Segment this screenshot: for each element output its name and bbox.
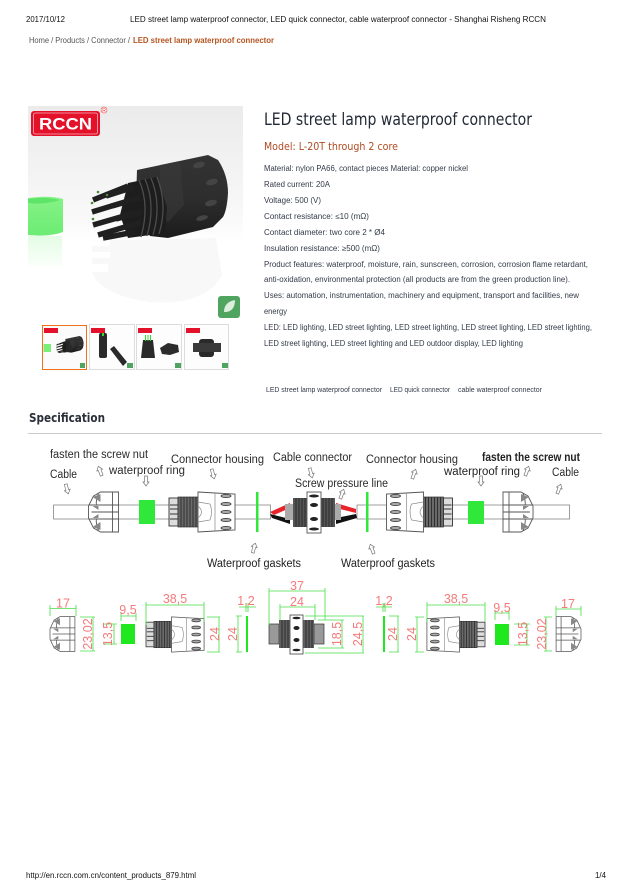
right screw nut	[503, 492, 533, 532]
right gasket dimensions: 1,2	[375, 594, 393, 608]
left nut dimensions: 17	[56, 596, 70, 610]
right ring dimensions: 9,5	[493, 601, 511, 615]
model: Model: L-20T through 2 core	[264, 141, 398, 153]
diagram labels: waterproof ring	[443, 466, 520, 478]
centre cable connector	[270, 492, 357, 533]
right nut dimensions: 23,02	[535, 618, 549, 650]
diagram labels: Cable connector	[273, 452, 352, 464]
right gasket dimensions	[375, 594, 400, 652]
diagram labels: fasten the screw nut	[50, 449, 149, 461]
diagram labels: Screw pressure line	[295, 478, 388, 490]
dimension drawings	[50, 579, 581, 654]
left connector housing	[169, 492, 235, 532]
right nut dimensions: 17	[561, 597, 575, 611]
right housing dimensions: 24	[405, 627, 419, 641]
centre connector dimensions: 24	[290, 595, 304, 609]
centre connector dimensions: 24,5	[351, 622, 365, 646]
product title: LED street lamp waterproof connector	[264, 110, 532, 129]
specification text block: anti-oxidation, environmental protection (all products are from the green production line).	[264, 275, 570, 284]
specification text block: Contact diameter: two core 2 * Ø4	[264, 228, 386, 237]
main product photo	[28, 106, 243, 320]
page header: LED street lamp waterproof connector, LED quick connector, cable waterproof connector - Shanghai Risheng RCCN	[130, 14, 546, 24]
page header: 2017/10/12	[26, 14, 65, 24]
left waterproof ring	[139, 500, 155, 524]
specification text block: Material: nylon PA66, contact pieces Material: copper nickel	[264, 164, 468, 173]
specification heading: Specification	[29, 411, 105, 425]
breadcrumb	[29, 36, 274, 45]
left housing dimensions	[146, 592, 222, 652]
exploded connector diagram	[50, 449, 580, 570]
left housing dimensions: 38,5	[163, 592, 187, 606]
logo: R	[102, 108, 106, 114]
specification text block: Product features: waterproof, moisture, rain, sunscreen, corrosion, corrosion flame retardant,	[264, 260, 588, 269]
left screw nut	[88, 492, 118, 532]
breadcrumb: Home / Products / Connector /	[29, 36, 131, 45]
left gasket dimensions: 1,2	[237, 594, 255, 608]
diagram labels: Waterproof gaskets	[341, 558, 435, 570]
diagram labels	[50, 449, 580, 570]
left ring dimensions: 9,5	[119, 603, 137, 617]
diagram labels: Connector housing	[366, 454, 458, 466]
logo: RCCN	[39, 114, 92, 134]
left gasket dimensions	[226, 594, 256, 652]
right waterproof ring	[468, 501, 484, 524]
diagram arrows	[63, 465, 564, 555]
specification text block: Rated current: 20A	[264, 180, 331, 189]
left ring dimensions: 13,5	[101, 622, 115, 646]
right connector housing	[386, 492, 452, 532]
reflection	[90, 238, 222, 302]
left gasket	[256, 492, 258, 532]
left nut dimensions	[50, 596, 95, 651]
specification text block: Insulation resistance: ≥500 (mΩ)	[264, 244, 380, 253]
right gasket	[366, 492, 368, 532]
tags: LED street lamp waterproof connector	[266, 387, 383, 394]
thumbnail 3	[136, 324, 182, 370]
left gasket dimensions: 24	[226, 627, 240, 641]
diagram labels: Waterproof gaskets	[207, 558, 301, 570]
diagram labels: fasten the screw nut	[482, 452, 580, 464]
page footer	[26, 870, 606, 880]
green leaf badge	[218, 296, 240, 318]
right housing dimensions	[405, 592, 485, 652]
specification text block	[264, 164, 592, 348]
right housing dimensions: 38,5	[444, 592, 468, 606]
specification text block: energy	[264, 307, 287, 316]
tags: cable waterproof connector	[458, 387, 543, 394]
centre connector dimensions: 37	[290, 579, 304, 593]
logo	[31, 107, 107, 136]
right gasket dimensions: 24	[386, 627, 400, 641]
right ring dimensions	[493, 601, 530, 646]
centre connector dimensions: 18,5	[330, 622, 344, 646]
diagram labels: Cable	[50, 469, 77, 481]
right ring dimensions: 13,5	[516, 622, 530, 646]
page footer: 1/4	[595, 870, 606, 880]
left nut dimensions: 23,02	[81, 618, 95, 650]
thumbnail 1	[42, 326, 86, 370]
left housing dimensions: 24	[208, 627, 222, 641]
tags: LED quick connector	[390, 387, 451, 394]
specification text block: Uses: automation, instrumentation, machinery and equipment, transport and facilities, new	[264, 291, 579, 300]
specification text block: LED street lighting, LED street lighting and LED outdoor display, LED lighting	[264, 339, 523, 348]
specification text block: Voltage: 500 (V)	[264, 196, 321, 205]
right nut dimensions	[535, 597, 581, 651]
cables	[54, 505, 570, 519]
diagram labels: Connector housing	[171, 454, 264, 466]
black connector	[91, 155, 228, 238]
diagram labels: waterproof ring	[108, 465, 185, 477]
thumbnail 4	[184, 324, 228, 370]
specification text block: Contact resistance: ≤10 (mΩ)	[264, 212, 369, 221]
thumbnail 2	[90, 324, 134, 370]
diagram labels: Cable	[552, 467, 579, 479]
breadcrumb: LED street lamp waterproof connector	[133, 36, 274, 45]
green waterproof ring	[28, 197, 63, 266]
page footer: http://en.rccn.com.cn/content_products_879.html	[26, 870, 196, 880]
thumbnails	[42, 324, 228, 370]
specification text block: LED: LED lighting, LED street lighting, LED street lighting, LED street lighting, LED street lighting,	[264, 323, 592, 332]
left ring dimensions	[101, 603, 137, 646]
tags	[266, 387, 543, 394]
centre connector dimensions	[269, 579, 365, 654]
